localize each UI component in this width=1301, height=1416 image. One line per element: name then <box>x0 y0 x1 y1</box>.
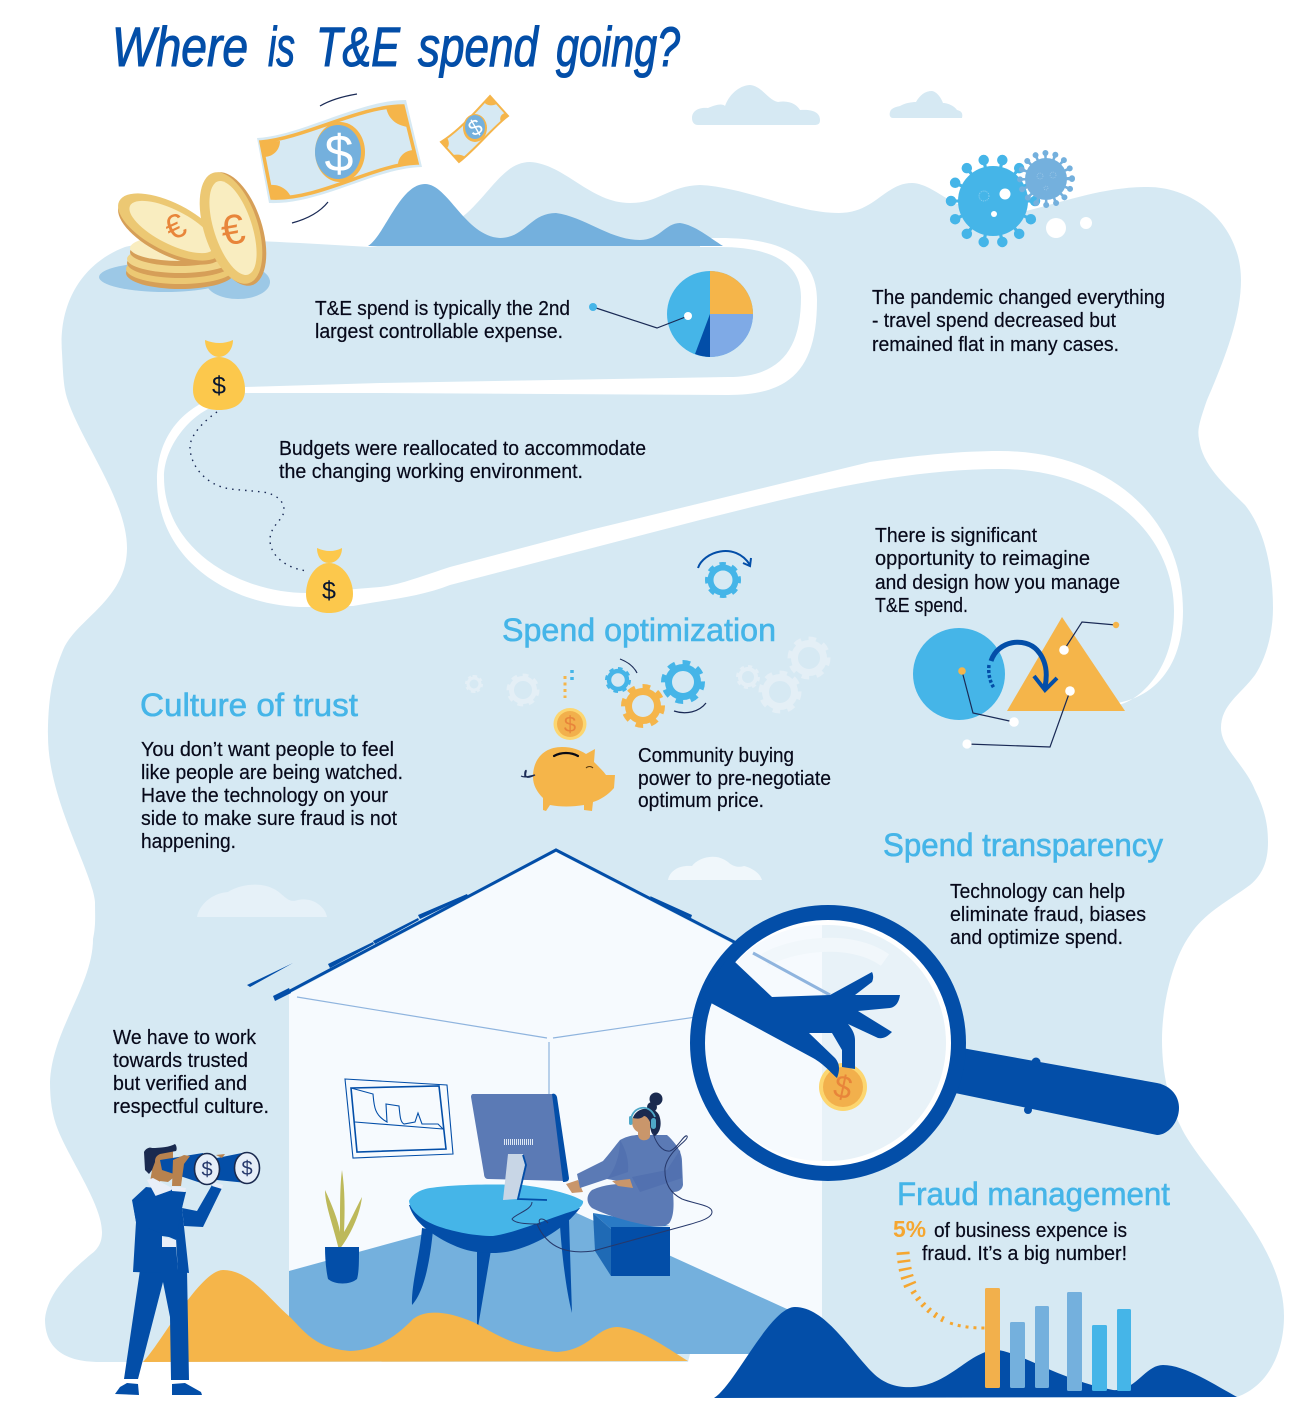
businessman with binoculars: $ <box>241 1158 253 1180</box>
icon: coin <box>554 708 586 740</box>
text: transparency: and optimize spend. <box>950 927 1123 949</box>
bar chart <box>985 1288 1131 1391</box>
businessman with binoculars <box>115 1144 260 1395</box>
title: T&E <box>316 15 400 78</box>
magnifying glass: $ <box>831 1068 856 1106</box>
title: Where <box>112 15 248 78</box>
text: budgets <box>279 438 646 483</box>
virus: small <box>1020 153 1072 205</box>
text: transparency: eliminate fraud, biases <box>950 904 1146 926</box>
text: pandemic: - travel spend decreased but <box>872 310 1116 332</box>
winding road: upper section <box>245 238 817 395</box>
text: community buying <box>638 745 831 812</box>
text: budgets: Budgets were reallocated to accommodate <box>279 438 646 460</box>
banknote: small <box>441 96 508 162</box>
winding road: lower section <box>157 403 1183 705</box>
house <box>247 850 822 1354</box>
magnifying glass <box>698 912 1179 1174</box>
text: pandemic <box>872 287 1165 356</box>
wall chart <box>345 1079 453 1158</box>
text: culture of trust <box>141 739 403 853</box>
dark blue hills <box>714 1307 1237 1398</box>
money bag: lower <box>306 548 353 613</box>
text: opportunity: and design how you manage <box>875 572 1120 594</box>
cables <box>512 1133 712 1252</box>
text: culture of trust: You don’t want people to feel <box>141 739 394 761</box>
coins: euro stack: € <box>159 206 192 248</box>
text: trusted culture: towards trusted <box>113 1050 248 1072</box>
text: opportunity <box>875 525 1120 617</box>
diagram: circle to triangle <box>913 617 1125 749</box>
title <box>112 15 680 78</box>
text: culture of trust: like people are being watched. <box>141 762 403 784</box>
dotted path between money bags <box>190 412 307 571</box>
text: community buying: Community buying <box>638 745 794 767</box>
text: community buying: optimum price. <box>638 790 764 812</box>
text: controllable expense: largest controllable expense. <box>315 321 563 343</box>
dotted arc from 5% to bar <box>903 1252 985 1328</box>
woman at computer <box>566 1092 683 1226</box>
cloud: left of house <box>197 885 327 917</box>
virus particles <box>1046 217 1092 238</box>
room floor <box>289 1200 822 1354</box>
icon: rotating gear <box>698 551 751 596</box>
gears: pale right <box>738 640 827 710</box>
heading: spend optimization: Spend optimization <box>502 612 776 648</box>
plant <box>325 1170 362 1284</box>
cloud: top right <box>890 91 962 118</box>
text: trusted culture: respectful culture. <box>113 1096 269 1118</box>
banknote: large: $ <box>325 125 354 183</box>
text: controllable expense <box>315 298 570 343</box>
text: culture of trust: side to make sure fraud is not <box>141 808 397 830</box>
text: trusted culture: We have to work <box>113 1027 257 1049</box>
heading: fraud management: Fraud management <box>897 1176 1170 1212</box>
title: is <box>268 15 295 78</box>
banknote: large <box>257 94 422 223</box>
text: opportunity: T&E spend. <box>875 595 968 617</box>
gears: pale left <box>466 676 537 704</box>
pie chart <box>589 271 753 357</box>
gears: coloured cluster <box>607 659 706 724</box>
money bag: upper: $ <box>212 372 226 400</box>
text: trusted culture <box>113 1027 269 1118</box>
falling coin dots <box>565 670 572 698</box>
icon: piggy bank <box>521 747 615 811</box>
text: fraud percentage: fraud. It’s a big number! <box>922 1243 1127 1265</box>
money bag: lower: $ <box>322 577 336 605</box>
virus: large <box>951 159 1035 243</box>
text: community buying: power to pre-negotiate <box>638 768 831 790</box>
coins: euro stack <box>99 164 279 299</box>
text: fraud percentage <box>893 1216 1127 1265</box>
businessman with binoculars: $ <box>201 1159 213 1181</box>
text: transparency: Technology can help <box>950 881 1125 903</box>
text: pandemic: remained flat in many cases. <box>872 334 1119 356</box>
text: fraud percentage: of business expence is <box>934 1220 1127 1242</box>
cloud: right of house <box>668 857 762 880</box>
text: opportunity: There is significant <box>875 525 1037 547</box>
text: opportunity: opportunity to reimagine <box>875 548 1090 570</box>
orange hills <box>143 1270 688 1362</box>
text: fraud percentage: 5% <box>893 1216 926 1242</box>
text: pandemic: The pandemic changed everything <box>872 287 1165 309</box>
text: transparency <box>950 881 1146 949</box>
text: trusted culture: but verified and <box>113 1073 247 1095</box>
mountains <box>368 184 723 246</box>
desk <box>409 1184 583 1333</box>
icon: coin: $ <box>564 712 576 737</box>
text: controllable expense: T&E spend is typically the 2nd <box>315 298 570 320</box>
title: going? <box>556 15 680 78</box>
title: spend <box>418 15 539 78</box>
text: culture of trust: Have the technology on your <box>141 785 388 807</box>
text: culture of trust: happening. <box>141 831 236 853</box>
money bag: upper <box>193 340 245 410</box>
computer monitor <box>471 1094 569 1200</box>
heading: spend transparency: Spend transparency <box>883 827 1163 863</box>
coins: euro stack: € <box>217 204 248 255</box>
seat cube <box>593 1213 670 1276</box>
banknote: small: $ <box>464 114 487 141</box>
text: budgets: the changing working environment. <box>279 461 583 483</box>
heading: culture of trust: Culture of trust <box>140 687 358 723</box>
cloud: top centre <box>692 85 820 125</box>
